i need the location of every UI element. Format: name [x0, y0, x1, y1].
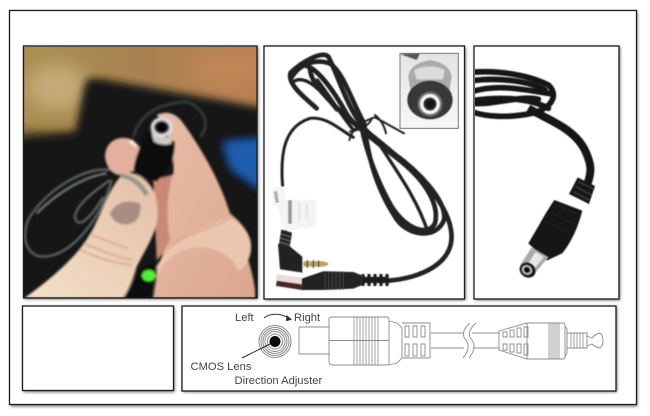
dark base under hand	[124, 260, 157, 298]
panel: coiled cable with plugs	[264, 46, 466, 300]
coiled cable strands	[282, 55, 452, 281]
panel: connector line diagram	[182, 306, 617, 392]
gap between fingers	[153, 173, 177, 260]
panel: hand holding connector photo	[13, 46, 267, 310]
rotation arrow	[264, 314, 291, 320]
line drawing: barrel connector	[299, 317, 603, 365]
inset: connector end close-up	[400, 53, 458, 128]
label: Right: Right	[294, 312, 321, 324]
thumb	[24, 173, 158, 298]
panel: empty white box	[22, 306, 174, 392]
main cable	[528, 108, 590, 183]
coil of cable	[472, 72, 553, 116]
index finger	[153, 113, 255, 298]
label: Left: Left	[235, 312, 255, 324]
cable loops	[25, 102, 205, 257]
connector body	[133, 130, 175, 182]
lens leader line	[242, 344, 270, 358]
palm fold	[157, 217, 251, 277]
panel: connector close-up on white	[472, 46, 620, 300]
straight jack plug	[276, 271, 389, 290]
label: CMOS Lens: CMOS Lens	[190, 361, 252, 373]
cable label	[273, 187, 316, 231]
label: Direction Adjuster: Direction Adjuster	[234, 375, 322, 387]
lens end view	[259, 326, 291, 358]
right-angle connector	[278, 229, 329, 273]
metal barrel tip	[517, 247, 548, 281]
middle fingertip	[105, 138, 142, 175]
moulded plug	[528, 177, 595, 261]
cable tie	[349, 115, 404, 140]
green indicator light	[142, 270, 156, 281]
